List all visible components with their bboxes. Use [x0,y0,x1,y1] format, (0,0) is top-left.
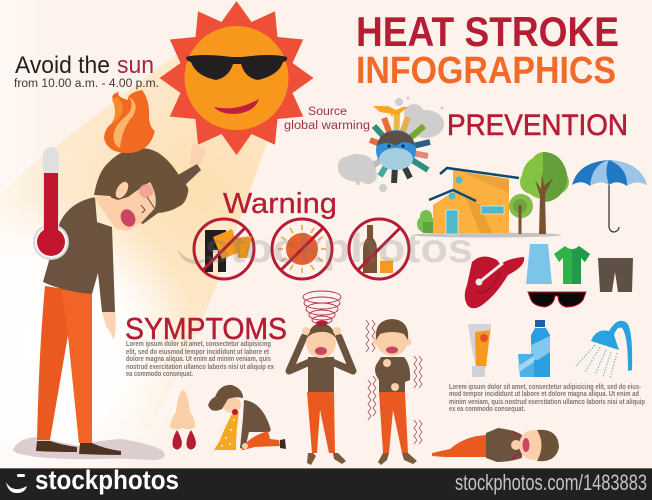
icon: red sunglasses [528,292,586,307]
face [94,182,156,231]
icon: sunscreen tube [468,324,491,377]
text: source global warming [284,106,370,132]
text: avoid the sun [14,52,159,90]
raised arm [190,143,206,165]
icon: no alcohol [349,219,409,279]
hanging hand [102,312,116,340]
icon: house and trees [413,152,569,238]
text: avoid the sun: sun [117,52,154,79]
icon: nose bleed [170,390,196,450]
footer logo [6,474,27,493]
icon: shorts [598,258,633,292]
icon: shower [576,321,632,378]
icon: sun with sunglasses [160,1,314,155]
mouth [118,207,138,229]
figure: man with chest pain [366,319,422,465]
text: source global warming: global warming [284,120,370,132]
footer brand: stockphotos [35,465,179,495]
figure: dizzy man [289,291,353,465]
text: avoid the sun: from 10.00 a.m. - 4.00 p.m. [14,78,159,90]
text block: symptoms [126,339,275,378]
heading: symptoms: SYMPTOMS [125,311,287,346]
watermark: stockphotos [205,225,473,271]
icon: umbrella [572,160,647,232]
text block: prevention: ex ea commodo consequat. [449,404,525,413]
icon: thermometer [33,147,69,260]
shadow [13,437,165,460]
icon: blue tank dress [526,244,552,284]
icon: red hat [465,256,524,308]
text block: symptoms: Lorem ipsum dolor sit amet, consectetur adipisicing [126,339,271,348]
icon: no sun exposure [272,219,332,279]
icon: polluted globe [338,96,444,192]
icon: green t-shirt [554,246,590,284]
footer bar [0,465,652,500]
figure: collapsed man [432,428,559,462]
title: INFOGRAPHICS [356,50,616,92]
sun light beam [0,55,268,430]
flame [104,90,155,153]
text: avoid the sun: Avoid the [15,52,110,79]
legs [37,286,92,443]
white glow lower left [0,190,200,468]
icon: water bottle and glass [518,320,550,377]
heading: warning: Warning [223,188,337,220]
heading: prevention: PREVENTION [447,109,628,142]
hair [94,148,188,224]
figure: main man overheated [13,90,206,460]
text block: symptoms: nostrud exercitation ullamco laboris nisi ut aliquip ex [126,362,275,371]
dizzy swirl [303,291,341,324]
text: source global warming: Source [308,106,347,118]
text block: symptoms: elit, sed do eiusmod tempor incididunt ut labore et [126,347,269,356]
title: HEAT STROKE [356,8,619,55]
text block: prevention [449,382,645,413]
icon: no hot clothes [194,219,254,279]
figure: vomiting boy [208,385,286,450]
title [356,8,619,92]
shirt [43,197,115,312]
text block: symptoms: ea commodo consequat. [126,369,193,378]
text block: symptoms: dolore magna aliqua. Ut enim ad minim veniam, quis [126,354,271,363]
shoes [36,441,77,452]
